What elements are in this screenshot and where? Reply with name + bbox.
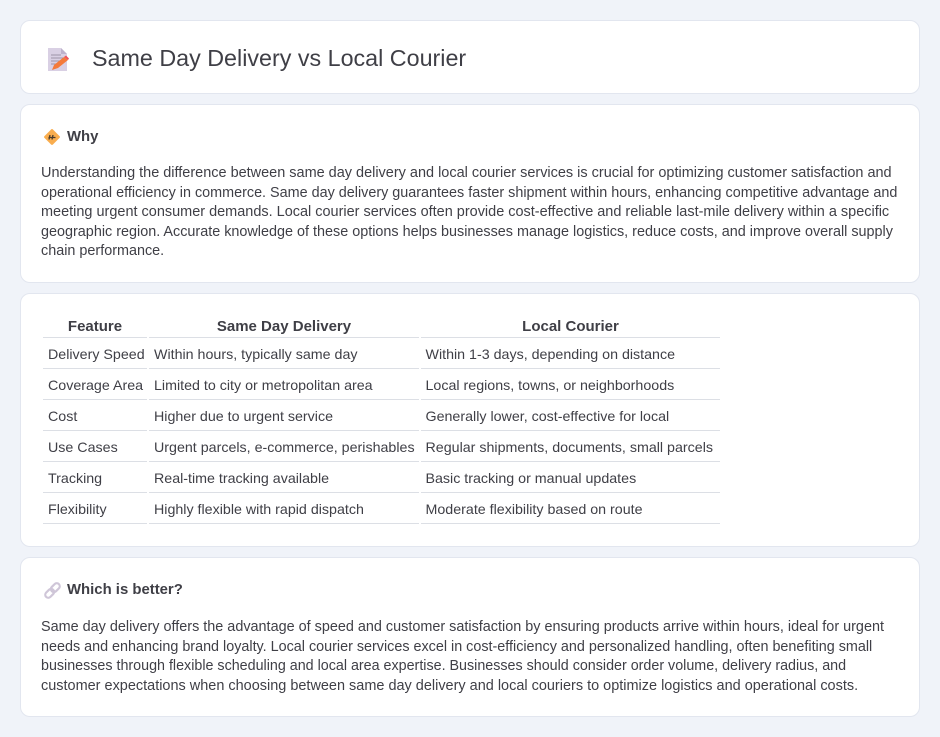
row: delivery speed: Within hours, typically same day (154, 347, 358, 363)
row: use cases: Use Cases (48, 440, 118, 456)
text block: why: Understanding the difference between same day delivery and local courier services is crucial for optimizing customer satisfaction and (41, 165, 892, 181)
text block: which is better: needs and enhancing brand loyalty. Local courier services excel in cost-efficiency and personalized handling, often benefiting small (41, 639, 872, 655)
row: tracking: Tracking (48, 471, 102, 487)
row: use cases (48, 440, 713, 456)
row: delivery speed: Delivery Speed (48, 347, 145, 363)
row: cost: Generally lower, cost-effective for local (426, 409, 669, 425)
row: cost (48, 409, 669, 425)
icon: chain link (44, 582, 61, 599)
row: tracking: Real-time tracking available (154, 471, 329, 487)
row: cost: Higher due to urgent service (154, 409, 333, 425)
header: local courier: Local Courier (522, 318, 619, 335)
panel: title (20, 20, 920, 94)
table header row (68, 318, 619, 335)
heading: why: Why (67, 129, 98, 145)
panel: why (20, 104, 920, 283)
text block: which is better: customer expectations when choosing between same day delivery and local couriers to optimize logistics and operational costs. (41, 678, 858, 694)
header: same day delivery: Same Day Delivery (217, 318, 351, 335)
row: use cases: Regular shipments, documents, small parcels (426, 440, 713, 456)
row: coverage area: Coverage Area (48, 378, 143, 394)
text block: which is better (41, 619, 884, 694)
header: feature: Feature (68, 318, 122, 335)
row: delivery speed: Within 1-3 days, depending on distance (426, 347, 675, 363)
text block: why: meeting urgent consumer demands. Local courier services often provide cost-effective and reliable last-mile delivery within a specific (41, 204, 889, 220)
row: flexibility: Moderate flexibility based on route (426, 502, 643, 518)
panel: comparison table (20, 293, 920, 547)
row: coverage area: Limited to city or metropolitan area (154, 378, 373, 394)
row: coverage area (48, 378, 674, 394)
row: flexibility: Highly flexible with rapid dispatch (154, 502, 364, 518)
row: tracking (48, 471, 636, 487)
row: flexibility (48, 502, 643, 518)
row: delivery speed (48, 347, 675, 363)
heading: which is better: Which is better? (67, 582, 183, 598)
row: use cases: Urgent parcels, e-commerce, perishables (154, 440, 415, 456)
panel: which is better (20, 557, 920, 717)
title text: Same Day Delivery vs Local Courier (92, 45, 466, 71)
icon: memo with pencil (48, 48, 69, 71)
text block: why: geographic region. Accurate knowledge of these options helps businesses manage logistics, reduce costs, and improve overall supply (41, 224, 893, 240)
text block: why (41, 165, 897, 259)
text block: why: operational efficiency in commerce. Same day delivery guarantees faster shipment within hours, enhancing competitive advantage and (41, 185, 897, 201)
row: coverage area: Local regions, towns, or neighborhoods (426, 378, 674, 394)
text block: why: chain performance. (41, 243, 164, 259)
row: tracking: Basic tracking or manual updates (426, 471, 636, 487)
icon: diamond warning sign (44, 129, 60, 145)
text block: which is better: Same day delivery offers the advantage of speed and customer satisfaction by ensuring products arrive within hours, ideal for urgent (41, 619, 884, 635)
row: flexibility: Flexibility (48, 502, 107, 518)
row: cost: Cost (48, 409, 77, 425)
text block: which is better: businesses through flexible scheduling and local area expertise. Businesses should consider order volume, delivery radius, and (41, 658, 846, 674)
